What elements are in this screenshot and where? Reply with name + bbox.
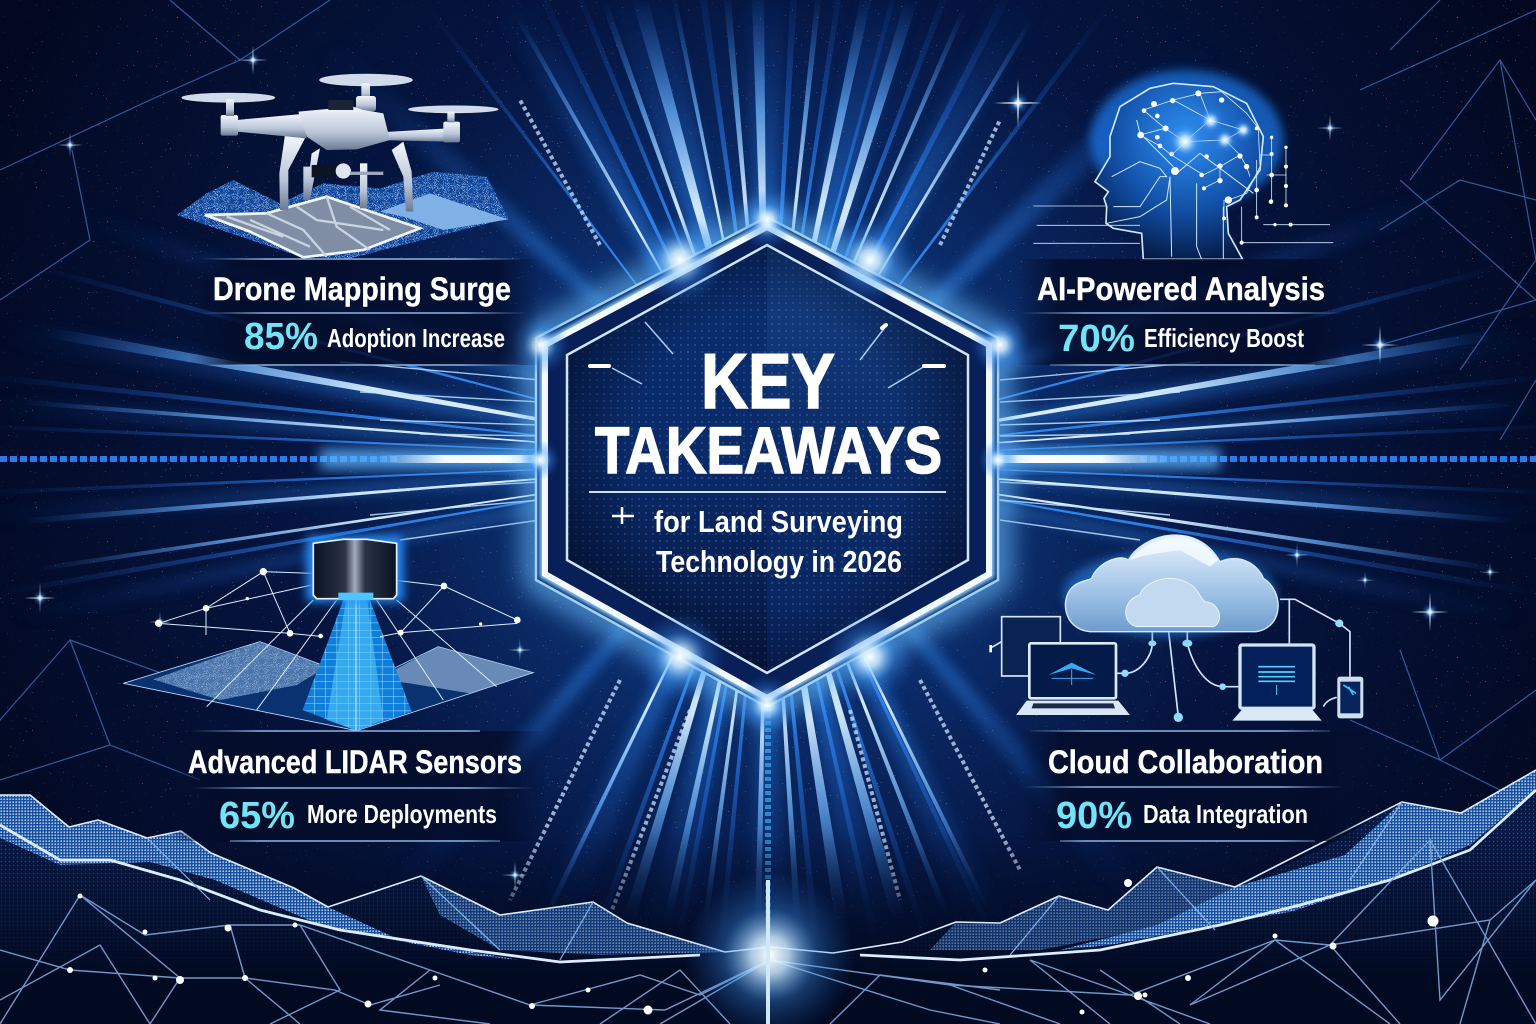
label band [190, 259, 540, 365]
title: KEY: KEY [701, 337, 835, 425]
terrain tint left [153, 642, 327, 700]
left beam core [380, 455, 540, 463]
brain circuit [1033, 92, 1333, 243]
background network [0, 0, 1536, 800]
network nodes [155, 568, 521, 638]
head silhouette [1095, 83, 1263, 259]
percentage: 85% [244, 316, 318, 358]
back tablet [1002, 617, 1060, 676]
lit slope right [980, 770, 1536, 958]
subtitle line one: for Land Surveying [654, 504, 903, 539]
scan lines and network [159, 572, 517, 731]
sparkle stars [24, 45, 1500, 888]
heading: AI-Powered Analysis [1037, 271, 1325, 307]
beam highlight [327, 600, 383, 731]
drone arms and motors [221, 83, 460, 142]
label rules [190, 731, 535, 841]
face contour lines [1107, 120, 1253, 259]
label: AI-Powered Analysis [1018, 259, 1348, 365]
lower network [0, 840, 1536, 1024]
lit slope left [0, 795, 520, 960]
brain flares [1162, 105, 1257, 165]
valley floor [0, 830, 1536, 1024]
dark lower fade [0, 830, 1536, 1024]
plus accent [612, 507, 634, 524]
terrain specks [177, 172, 508, 258]
description: Adoption Increase [327, 323, 505, 353]
label band [170, 731, 545, 841]
mapped white terrain [205, 197, 420, 257]
heading: Advanced LIDAR Sensors [188, 744, 522, 780]
hexagon inner left face [567, 245, 767, 673]
label: Cloud Collaboration [1020, 731, 1365, 841]
left laptop [1016, 643, 1130, 715]
description: Efficiency Boost [1144, 323, 1304, 353]
hexagon edge shading [567, 245, 968, 673]
title rule [589, 491, 946, 493]
hexagon bright ring [545, 227, 989, 698]
percentage: 90% [1056, 795, 1132, 837]
hexagon corner flares [510, 190, 1030, 735]
back cloud [1065, 535, 1278, 632]
terrain contour lines [227, 197, 390, 257]
brain nodes [1137, 90, 1293, 245]
terrain tint right [377, 647, 533, 693]
lit slope middle left [421, 876, 725, 955]
inner accent marks [590, 322, 944, 388]
hexagon inner outline [567, 245, 968, 673]
scan plane [123, 620, 533, 731]
title: TAKEAWAYS: TAKEAWAYS [595, 413, 942, 487]
mountain silhouette right [770, 770, 1536, 1000]
label rules [1022, 731, 1345, 841]
label band [1020, 731, 1365, 841]
central horizon flare [685, 870, 855, 1024]
description: More Deployments [307, 799, 497, 829]
icon: AI head with neural brain [1033, 70, 1333, 259]
propeller blades [182, 74, 498, 113]
scanned terrain left [153, 642, 327, 700]
mountain silhouette left [0, 795, 770, 1000]
thin lines near hexagon [340, 362, 1200, 540]
hexagon inner right face [767, 245, 968, 673]
icon: drone over terrain [177, 74, 508, 258]
label rules [1020, 313, 1345, 365]
scan beam [303, 600, 412, 731]
sensor housing [313, 539, 397, 599]
left beam glow [320, 449, 540, 469]
sensor glow [307, 537, 403, 602]
phone [1337, 677, 1363, 718]
drone rear hump [328, 100, 353, 110]
label rules [200, 259, 528, 365]
connector lines [990, 599, 1350, 717]
right beam core [1000, 455, 1170, 463]
heading: Drone Mapping Surge [213, 271, 511, 307]
heading: Cloud Collaboration [1048, 744, 1323, 780]
connector nodes [989, 619, 1343, 722]
vertical horizon beam [766, 880, 770, 1024]
cloud highlight [1130, 538, 1218, 567]
label: Advanced LIDAR Sensors [170, 731, 545, 841]
lit slope middle right [930, 867, 1235, 950]
right laptop [1232, 645, 1322, 721]
drone legs [279, 135, 413, 212]
gimbal camera [312, 163, 383, 179]
hexagon dot texture [567, 245, 968, 673]
percentage: 65% [219, 795, 295, 837]
network nodes [67, 879, 1438, 1014]
hexagon frame [536, 217, 998, 707]
icon: cloud with connected devices [989, 535, 1363, 722]
sensor lens strip [338, 593, 373, 600]
node flare [508, 638, 532, 662]
hexagon outer glow [536, 217, 998, 707]
left dashed beam [0, 456, 400, 462]
cloud glow [1063, 550, 1277, 637]
central hexagon panel [510, 190, 1030, 735]
horizontal light beams [0, 449, 1536, 469]
dashed data rays [510, 100, 1020, 1000]
head glow [1090, 70, 1283, 210]
front cloud [1126, 578, 1219, 627]
ridge lines [0, 770, 1536, 962]
mountain wireframe landscape [0, 770, 1536, 1024]
terrain point cloud [177, 172, 508, 258]
percentage: 70% [1058, 318, 1135, 360]
light ridge [380, 193, 508, 230]
icon: LIDAR sensor scanning terrain [123, 537, 533, 731]
description: Data Integration [1143, 799, 1308, 829]
right dashed beam [1140, 456, 1536, 462]
drone body [298, 107, 390, 150]
label: Drone Mapping Surge [190, 259, 540, 365]
hexagon ring glow [545, 227, 989, 698]
subtitle line two: Technology in 2026 [656, 544, 902, 579]
label band [1018, 259, 1348, 365]
right beam glow [1000, 449, 1220, 469]
